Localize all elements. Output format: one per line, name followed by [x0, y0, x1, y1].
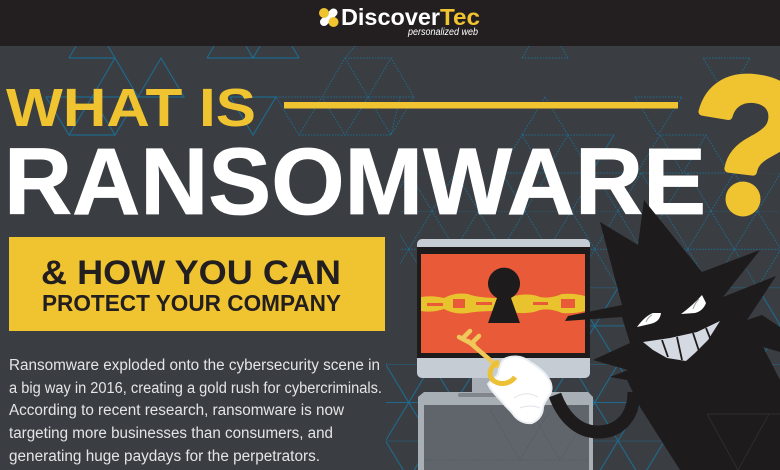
hacker arm	[555, 392, 634, 432]
monitor stand	[472, 376, 500, 394]
intro paragraph	[9, 357, 382, 465]
heading: what is: WHAT IS	[6, 78, 256, 138]
logo wordmark accent: Tec	[440, 4, 480, 30]
header bar	[0, 0, 780, 46]
monitor bezel	[417, 247, 590, 358]
desk base	[418, 392, 593, 470]
intro paragraph: generating huge paydays for the perpetrators.	[9, 448, 320, 465]
hacker pupils	[646, 299, 699, 322]
intro paragraph: a big way in 2016, creating a gold rush for cybercriminals.	[9, 380, 382, 397]
hacker body	[565, 200, 780, 470]
banner background	[9, 237, 385, 331]
triangle pattern: solid upper left	[46, 46, 299, 135]
logo wordmark: Discover	[341, 4, 440, 30]
intro paragraph: According to recent research, ransomware is now	[9, 402, 345, 419]
illustration: key	[459, 331, 515, 384]
screen	[421, 254, 585, 353]
illustration: computer	[417, 239, 593, 470]
heading rule	[284, 102, 678, 108]
logo	[319, 4, 480, 38]
triangle pattern: dotted upper	[276, 46, 752, 173]
banner line one: & HOW YOU CAN	[41, 254, 341, 292]
intro paragraph: Ransomware exploded onto the cybersecurity scene in	[9, 357, 380, 374]
faint triangles on desk	[424, 410, 589, 460]
hacker eye right	[681, 295, 706, 314]
triangle pattern: solid lower right	[417, 287, 780, 470]
logo tagline: personalized web	[407, 27, 478, 38]
logo icon	[319, 8, 338, 27]
banner line two: PROTECT YOUR COMPANY	[42, 290, 341, 316]
hacker grin	[643, 321, 720, 361]
subtitle banner	[9, 237, 385, 331]
illustration: hacker	[555, 200, 780, 470]
hacker eye left	[637, 313, 661, 327]
intro paragraph: targeting more businesses than consumers, and	[9, 425, 333, 442]
stand shadow	[458, 393, 500, 397]
triangle pattern: solid lower middle	[386, 363, 417, 470]
heading: question mark	[698, 74, 780, 216]
illustration: gloved hand	[488, 356, 552, 423]
chain	[421, 294, 585, 314]
triangle pattern: dotted right band	[400, 173, 780, 287]
keyhole	[488, 268, 520, 323]
monitor casing	[417, 239, 590, 378]
faint triangles on body	[707, 414, 780, 470]
glove finger creases	[514, 394, 540, 408]
desk base front	[424, 405, 589, 470]
heading: ransomware: RANSOMWARE	[4, 129, 706, 235]
